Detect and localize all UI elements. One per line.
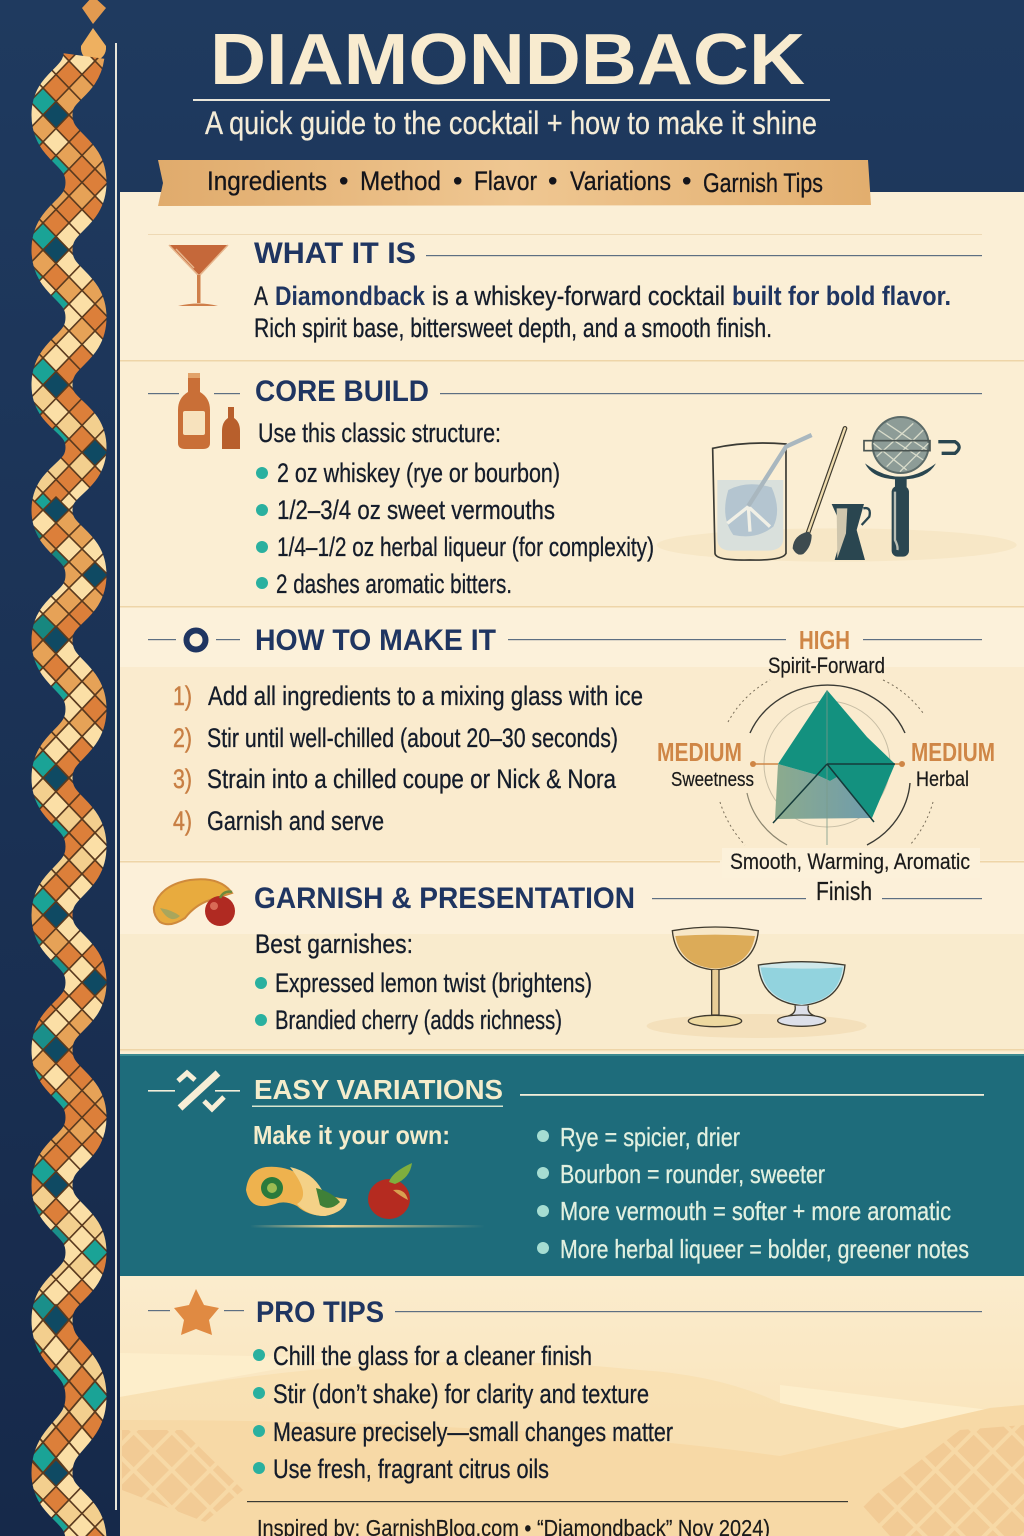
panel: what it is [148,234,982,343]
label: medium sweetness [657,737,754,791]
icon: ring [186,630,206,650]
top loose diamond one [82,0,106,24]
vertical white rule [115,43,117,1510]
banner: topics ribbon: Method [360,166,441,196]
steps list: Garnish and serve [207,806,384,836]
banner: topics ribbon: Ingredients [207,166,327,196]
label: high spirit-forward [768,625,885,678]
body: first line [254,281,951,311]
body: first line: is a whiskey-forward cocktail [432,281,725,311]
gold coupe [672,927,758,1027]
label: medium herbal [911,737,995,791]
steps list: 3) [173,764,192,794]
variations list: More vermouth = softer + more aromatic [560,1196,951,1226]
label: finish: Smooth, Warming, Aromatic [730,849,970,874]
label: medium herbal: Herbal [916,768,969,791]
strainer [864,417,959,557]
mosaic serpent ribbon [32,0,106,1536]
banner: topics ribbon: • [453,166,462,196]
label: medium herbal: MEDIUM [911,737,995,767]
steps list: Add all ingredients to a mixing glass with ice [208,681,643,711]
label: finish [722,848,980,906]
label: medium sweetness: Sweetness [671,769,754,791]
heading: what it is: WHAT IT IS [254,237,416,270]
icon: lemon twist and cherry [154,879,235,926]
illustration: coupe glasses [647,927,867,1038]
intro text: Use this classic structure: [258,418,501,448]
ingredient list: 1/2–3/4 oz sweet vermouths [277,495,555,525]
heading underline [252,1106,503,1107]
title: DIAMONDBACK [210,20,805,100]
icon: apple cherry [368,1163,412,1219]
tips list [253,1341,673,1484]
intro: best garnishes: Best garnishes: [255,929,413,959]
illustration: bar tools [657,417,1017,562]
body: first line: built for bold flavor. [732,281,951,311]
ingredient list: 2 oz whiskey (rye or bourbon) [277,458,560,488]
panel: main cream body [120,192,1024,1536]
jigger [832,504,870,560]
mixing glass [713,435,812,560]
banner: topics ribbon [158,160,871,206]
steps list: 2) [173,723,192,753]
steps list: 4) [173,806,192,836]
heading: easy variations: EASY VARIATIONS [254,1074,503,1105]
subheading: make it your own: Make it your own: [253,1120,450,1150]
title rule [193,99,830,101]
banner: topics ribbon: • [548,166,557,196]
steps list: 1) [173,681,192,711]
garnish list [255,968,592,1035]
ingredient list: 2 dashes aromatic bitters. [276,569,512,599]
banner: topics ribbon: Flavor [474,166,537,196]
subtitle: A quick guide to the cocktail + how to make it shine [205,105,817,141]
steps list [173,681,643,836]
icon: martini glass [169,245,228,306]
heading: core build: CORE BUILD [255,375,429,408]
steps list: Strain into a chilled coupe or Nick & Nora [207,764,617,794]
heading: how to make it: HOW TO MAKE IT [255,624,496,657]
garnish list: Expressed lemon twist (brightens) [275,968,592,998]
banner: topics ribbon: Variations [570,166,671,196]
icon: star [174,1289,219,1335]
banner: topics ribbon: • [339,166,348,196]
panel: garnish and presentation [154,879,982,1038]
tips list: Stir (don’t shake) for clarity and texture [273,1379,649,1409]
label: finish: Finish [816,876,872,906]
tips list: Chill the glass for a cleaner finish [273,1341,592,1371]
panel: how to make it [148,624,995,906]
decorative gold rule [250,1225,485,1228]
tips list: Measure precisely—small changes matter [273,1417,673,1447]
body: second line: Rich spirit base, bittersweet depth, and a smooth finish. [254,313,772,343]
ingredient list [256,458,654,599]
banner: topics ribbon: • [682,166,691,196]
panel: pro tips [120,1276,1024,1536]
heading: pro tips: PRO TIPS [256,1296,384,1329]
tips list: Use fresh, fragrant citrus oils [273,1454,549,1484]
ingredient list: 1/4–1/2 oz herbal liqueur (for complexity) [277,532,654,562]
body: first line: A [254,281,268,311]
label: high spirit-forward: Spirit-Forward [768,653,885,678]
icon: citrus twist [246,1167,347,1216]
variations list [537,1122,969,1264]
body: first line: Diamondback [275,281,426,311]
banner: topics ribbon: Garnish Tips [703,168,823,198]
top loose diamond two [81,28,106,62]
blue coupe [758,962,845,1026]
label: medium sweetness: MEDIUM [657,737,742,767]
icon: bottles [178,373,240,449]
heading: garnish: GARNISH & PRESENTATION [254,882,635,915]
chart: flavor radar [720,680,933,845]
panel: easy variations [120,1054,1024,1276]
icon: swap marks [178,1073,224,1109]
garnish list: Brandied cherry (adds richness) [275,1005,562,1035]
variations list: Bourbon = rounder, sweeter [560,1159,825,1189]
variations list: Rye = spicier, drier [560,1122,740,1152]
bar spoon [793,428,845,555]
panel: core build [148,373,1017,599]
steps list: Stir until well-chilled (about 20–30 seconds) [207,723,618,753]
label: high spirit-forward: HIGH [799,625,850,655]
